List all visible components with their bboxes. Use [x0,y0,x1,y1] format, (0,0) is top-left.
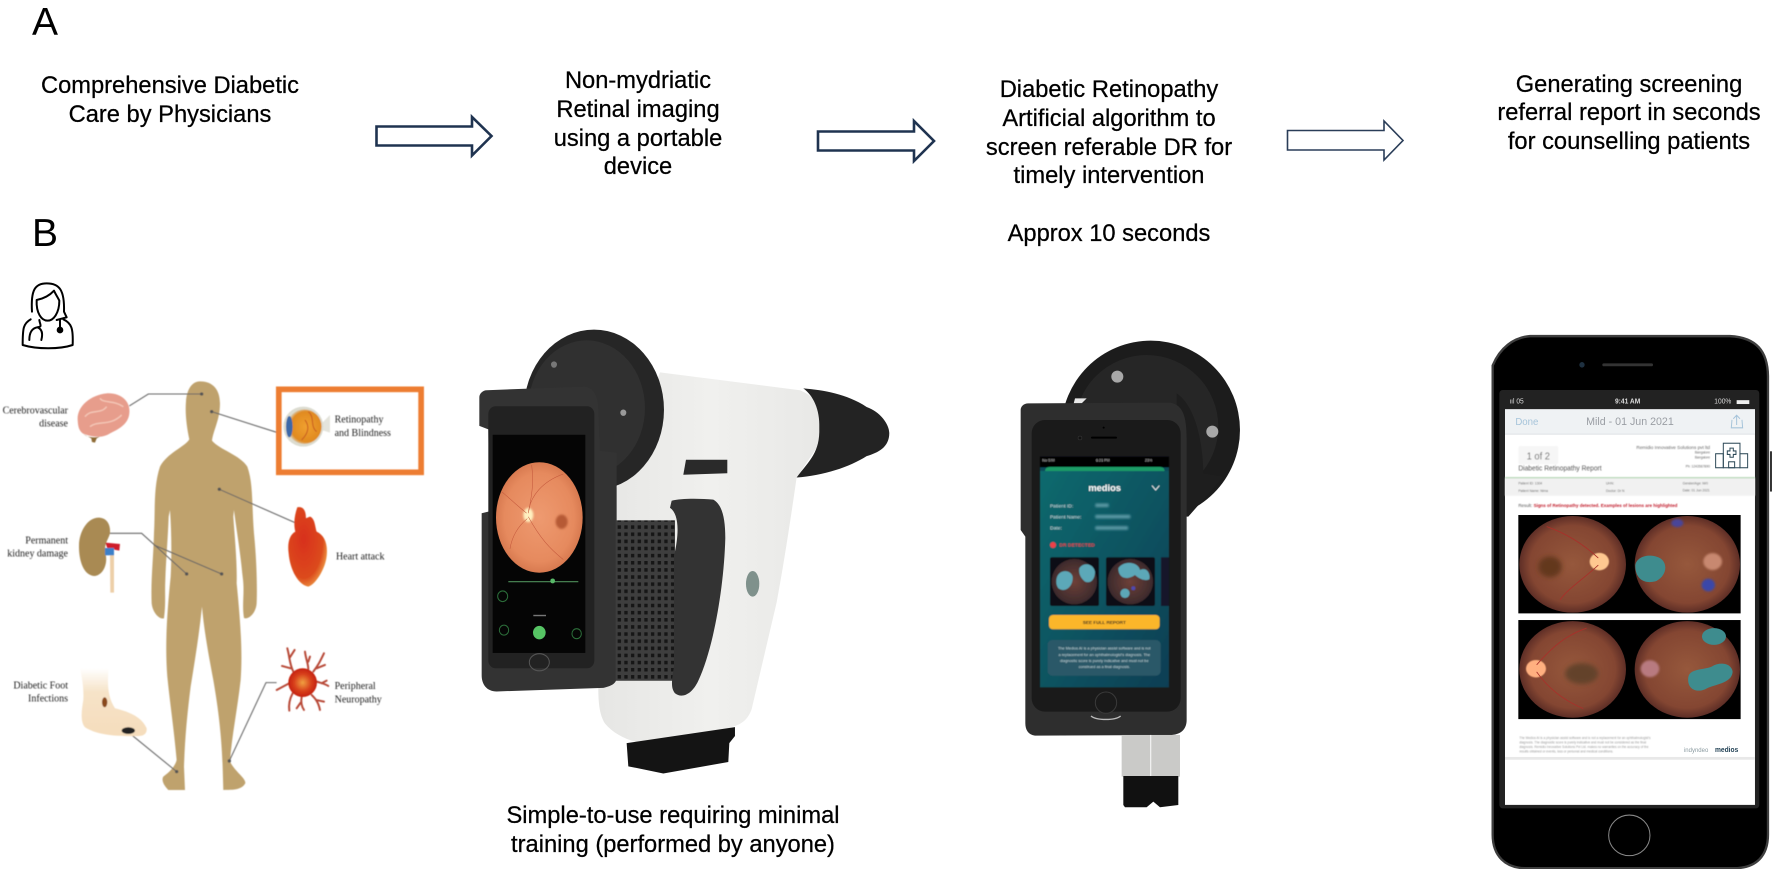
label: diabetic foot infections: Diabetic Foot [13,680,68,691]
step: diabetic retinopathy algorithm: timely intervention [1014,163,1204,189]
rubber eyecup [797,388,889,478]
base [1123,776,1178,807]
icon: foot [80,668,147,736]
status bar: 9:41 AM [1615,399,1641,406]
report heading: Bangalore [1695,450,1710,454]
caption: simple to use: training (performed by anyone) [511,832,835,858]
icon: hospital [1716,443,1748,468]
step: non-mydriatic retinal imaging: Retinal imaging [556,97,720,123]
phone body [1493,336,1772,868]
phone screen [493,435,585,653]
step: non-mydriatic retinal imaging: using a portable [554,126,722,152]
icon: female doctor [23,283,73,348]
patient meta band: Doctor: Dr N [1606,489,1625,493]
report heading [1518,445,1710,473]
footer disclaimer: The Medios AI is a physician assist software and is not a replacement for an ophthalmologist's [1519,736,1651,740]
textured grip [616,520,675,681]
step: comprehensive diabetic care: Care by Physicians [69,102,271,128]
report heading: 1 of 2 [1527,451,1550,462]
nav bar: Done [1515,417,1539,428]
rear disc [1061,341,1240,519]
earpiece and camera [1579,362,1653,368]
disclaimer: a replacement for an ophthalmologist's diagnosis. The [1059,653,1150,657]
screen bezel [1499,390,1759,808]
label: cerebrovascular disease: Cerebrovascular [3,405,69,416]
footer disclaimer: diagnosis. Remidio Innovative Solutions Pvt Ltd. makes no warranties on the accuracy of the [1519,745,1649,749]
dark handle [670,499,725,696]
device: handheld retinal camera with phone [479,330,889,773]
caption: simple to use: Simple-to-use requiring minimal [506,803,840,829]
device: phone with screening report [1493,336,1772,868]
home button [1091,692,1121,719]
step: diabetic retinopathy algorithm: Diabetic Retinopathy [1000,77,1218,103]
stem [1122,735,1180,777]
result line: Result: Signs of Retinopathy detected. Examples of lesions are highlighted [1518,503,1678,508]
status bar: 6:21 PM [1096,459,1110,463]
label: peripheral neuropathy: Neuropathy [335,694,382,705]
label: diabetic foot infections: Infections [28,694,68,705]
detection flag: DR DETECTED [1059,543,1095,549]
disclaimer: The Medios AI is a physician assist software and is not [1058,647,1152,651]
brand marks: indyndeo [1684,747,1709,754]
mount foot [627,727,735,773]
step: diabetic retinopathy algorithm: Approx 10 seconds [1008,221,1210,247]
step: generating referral report: Generating screening [1516,72,1742,98]
report heading: Ph: 1243567890 [1686,465,1710,469]
patient fields: Date: [1050,526,1062,532]
panel: highlighted eye box [279,389,421,472]
phone [488,406,594,668]
step: generating referral report: referral report in seconds [1497,100,1761,126]
brand badge [746,571,759,597]
camera white body [598,372,822,744]
label: permanent kidney damage: kidney damage [7,549,69,560]
illustration: diabetes complications body map [3,381,421,790]
report button: SEE FULL REPORT [1083,620,1126,625]
patient fields: Patient ID: [1050,503,1073,509]
disclaimer: diagnostic score is purely indicative and must not be [1060,659,1149,663]
arrow: step 3 to step 4 [1288,121,1403,160]
nav bar [1505,409,1755,434]
phone [1032,420,1181,712]
step: generating referral report: for counselling patients [1508,129,1750,155]
icon: kidney [79,518,120,593]
label: peripheral neuropathy: Peripheral [335,681,376,692]
icon: eye [283,407,330,447]
status bar: ııl 05 [1509,399,1524,406]
patient meta band: UHN: [1606,481,1614,486]
step: non-mydriatic retinal imaging: Non-mydriatic [565,68,711,94]
icon: neuron [277,648,328,711]
nav bar: Mild - 01 Jun 2021 [1586,416,1674,428]
human silhouette [151,381,257,790]
report button [1049,615,1160,629]
heatmap thumbnails [1050,557,1169,606]
disclaimer [1048,640,1161,676]
report heading: Bangalore [1695,456,1710,460]
earpiece [1078,427,1117,440]
label: cerebrovascular disease: disease [39,419,69,430]
report screen [1505,399,1755,805]
icon: brain [78,393,129,437]
battery [1737,400,1749,404]
panel label B: B [32,212,58,255]
status bar: No SIM [1042,459,1055,463]
mounting disc [524,330,664,490]
patient meta band: Patient ID: 1304 [1518,481,1542,486]
report heading: Remidio Innovative Solutions pvt ltd [1636,445,1710,451]
step: diabetic retinopathy algorithm: screen referable DR for [986,135,1232,161]
home button [1609,815,1650,856]
patient meta band [1505,477,1755,496]
patient meta band: Gender/Age: M/0 [1683,481,1708,486]
report heading: Diabetic Retinopathy Report [1518,465,1602,473]
patient meta band: Patient Name: Nima [1518,489,1548,493]
connector lines [110,394,295,772]
label: retinopathy and blindness: Retinopathy [335,415,383,426]
focus knob [683,460,727,475]
brand marks: medios [1715,747,1738,754]
step: non-mydriatic retinal imaging: device [604,154,672,180]
arrow: step 1 to step 2 [376,117,492,156]
fundus image [496,462,583,573]
icon: heart [288,507,327,587]
disclaimer: construed as a final diagnosis. [1079,665,1130,669]
label: permanent kidney damage: Permanent [25,535,68,546]
cradle [1021,403,1187,736]
footer disclaimer: diagnosis. The diagnostic score is purely indicative and must not be considered as the final [1519,741,1646,745]
status bar: 23% [1145,459,1153,463]
home button [529,654,549,671]
capture controls [498,578,581,639]
arrow: step 2 to step 3 [818,121,934,161]
patient meta band: Date: 01 Jun 2021 [1683,488,1710,493]
footer disclaimer: results obtained or events, loss or personal and medical conditions. [1519,750,1613,754]
panel label A: A [32,1,58,44]
patient fields: Patient Name: [1050,515,1082,521]
app title: medios [1088,483,1121,493]
label: retinopathy and blindness: and Blindness [335,428,391,439]
device: medios AI phone result [1021,341,1240,807]
phone cradle [479,387,617,691]
step: comprehensive diabetic care: Comprehensive Diabetic [41,73,299,99]
step: diabetic retinopathy algorithm: Artificial algorithm to [1002,106,1216,132]
fundus images [1518,515,1741,719]
label: heart attack: Heart attack [336,551,384,562]
status bar: 100% [1714,399,1731,406]
screen [1040,457,1169,687]
